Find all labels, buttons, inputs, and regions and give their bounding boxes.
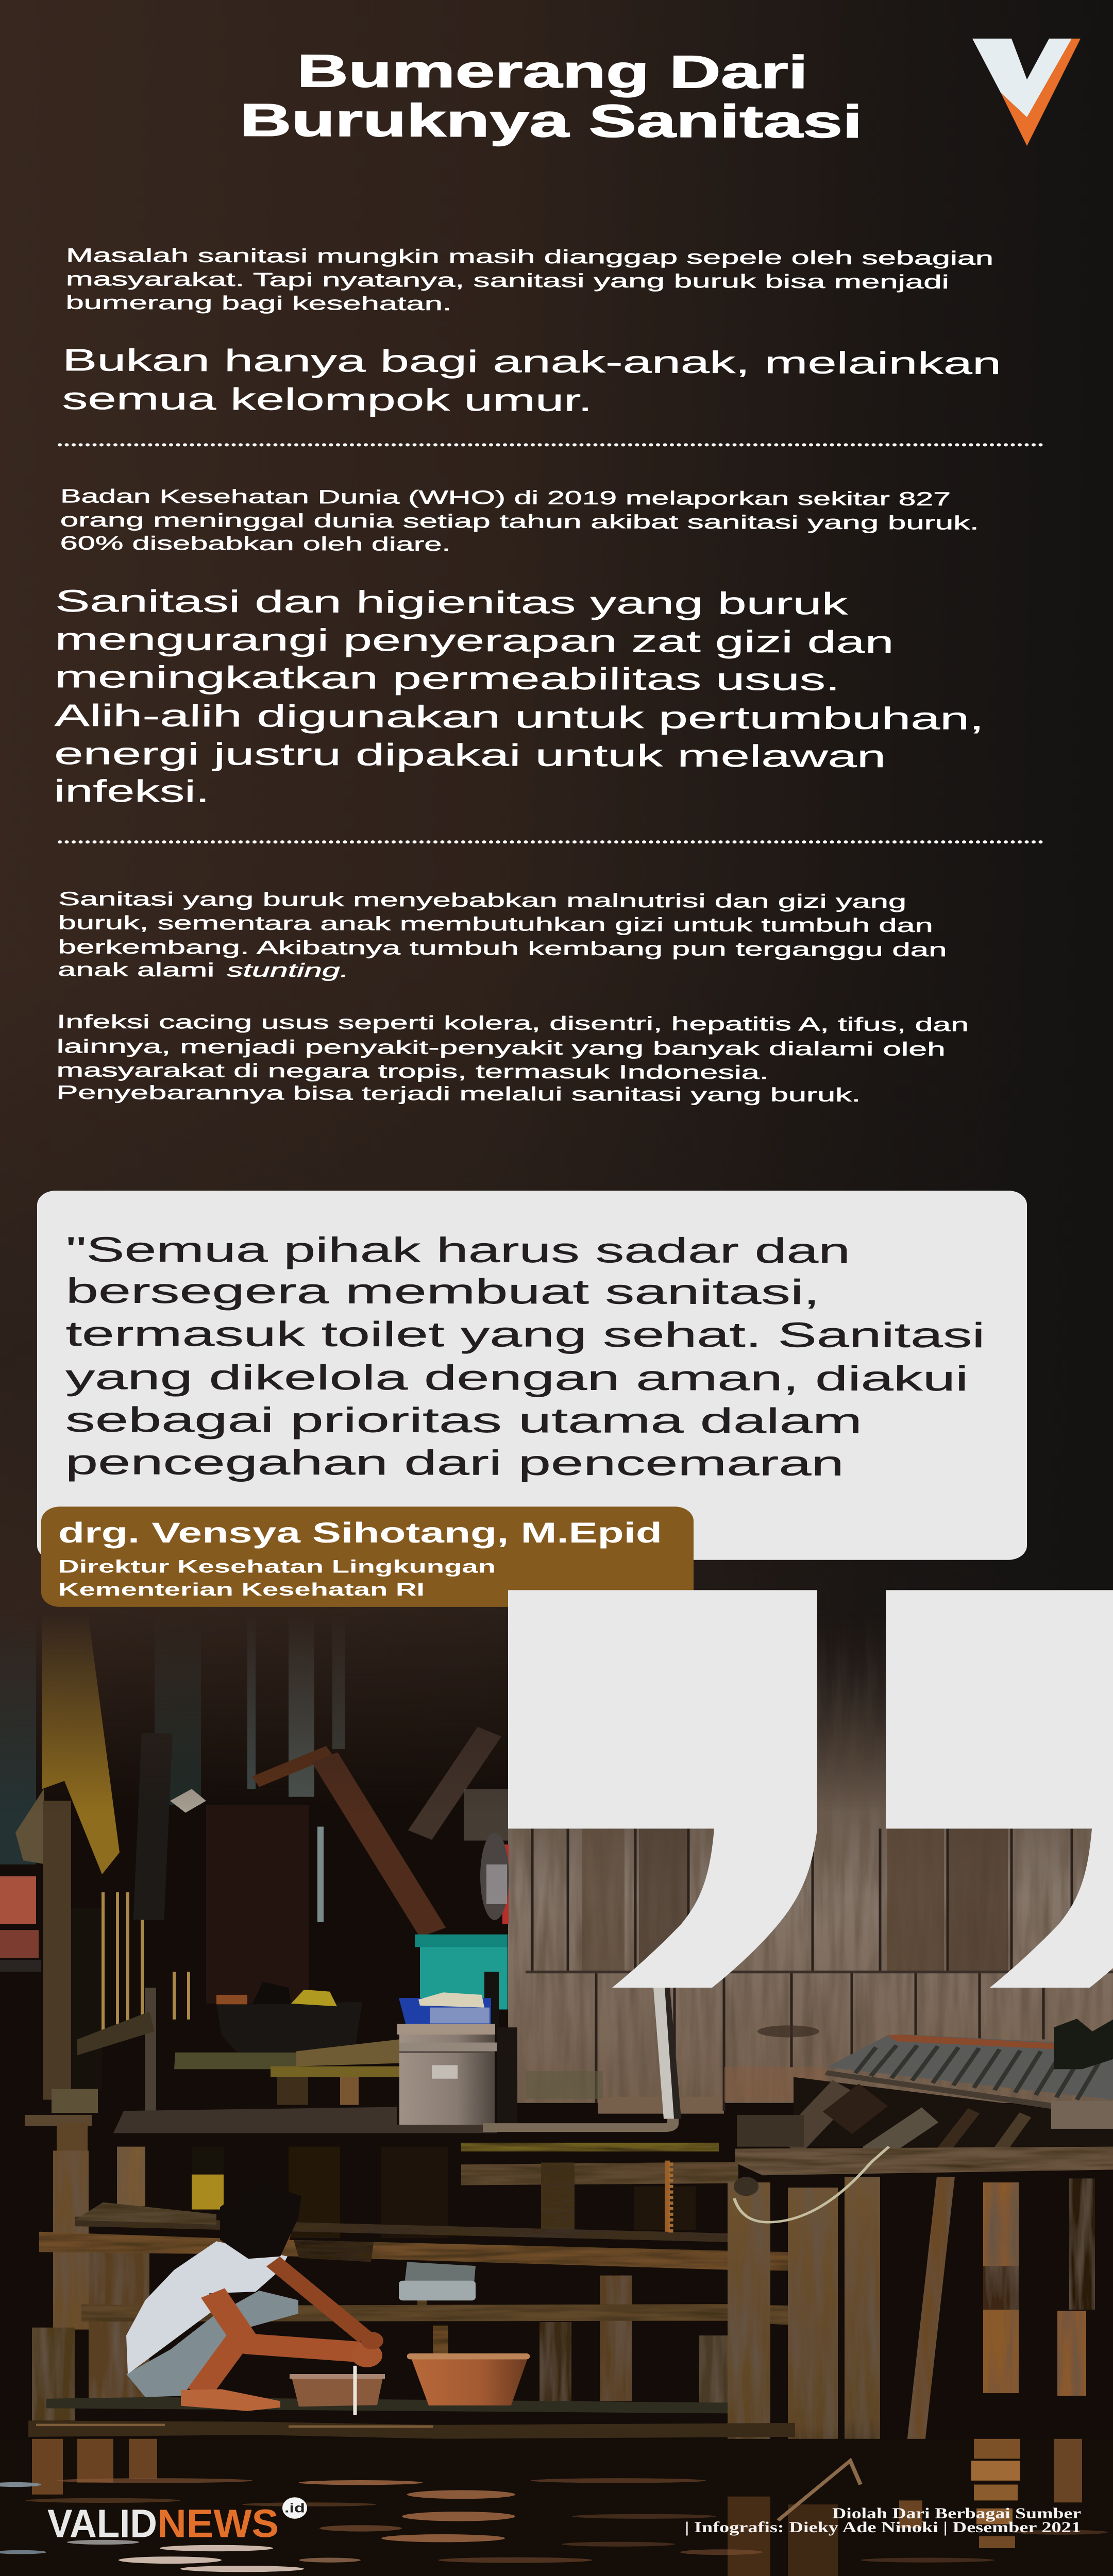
quote text: "Semua pihak harus sadar dan (66, 1230, 850, 1270)
dotted divider 1 (60, 443, 1043, 447)
panel: quote (37, 1191, 1027, 1560)
text block: intro: bumerang bagi kesehatan. (65, 292, 452, 315)
speaker name: drg. Vensya Sihotang, M.Epid (58, 1517, 662, 1549)
highlight: absorption and infection: Alih-alih digunakan untuk pertumbuhan, (55, 698, 984, 736)
text block: intestinal infections (56, 1011, 969, 1106)
blue basket with white stripes (399, 1992, 491, 2025)
text block: intro: masyarakat. Tapi nyatanya, sanitasi yang buruk bisa menjadi (66, 268, 949, 293)
left dark interior with hanging cloth and corrugated sheet (0, 1590, 509, 2119)
title: Buruknya Sanitasi (240, 94, 863, 147)
highlight: all age groups (62, 343, 1001, 419)
source credits: Diolah Dari Berbagai Sumber (832, 2505, 1081, 2522)
quote text (65, 1230, 985, 1483)
deck and under log (28, 2397, 795, 2489)
teal bucket (415, 1934, 508, 2009)
speaker role: Direktur Kesehatan Lingkungan (58, 1556, 496, 1577)
logo: Validnews (47, 2497, 307, 2546)
text block: WHO statistic: orang meninggal dunia setiap tahun akibat sanitasi yang buruk. (60, 510, 979, 534)
text block: intestinal infections: Penyebarannya bisa terjadi melalui sanitasi yang buruk. (56, 1082, 861, 1106)
text block: WHO statistic (60, 485, 979, 557)
dotted divider 2 (60, 840, 1043, 844)
text block: stunting: stunting. (227, 960, 349, 981)
highlight: all age groups: Bukan hanya bagi anak-anak, melainkan (62, 343, 1001, 381)
text block: stunting: buruk, sementara anak membutuhkan gizi untuk tumbuh dan (58, 912, 933, 937)
drain pipe (483, 1988, 681, 2128)
highlight: absorption and infection: meningkatkan permeabilitas usus. (55, 659, 840, 697)
text block: stunting (58, 888, 947, 984)
text block: WHO statistic: 60% disebabkan oleh diare. (60, 533, 451, 555)
logo: Validnews: NEWS (157, 2501, 279, 2546)
highlight: absorption and infection (54, 583, 985, 811)
logo: V mark (972, 39, 1081, 146)
black tub with yellow cloth (216, 1981, 362, 2052)
text block: intestinal infections: Infeksi cacing usus seperti kolera, disentri, hepatitis A, tifus, dan (57, 1011, 969, 1036)
icon: large closing quotation marks (508, 1590, 1113, 1988)
corrugated roof, boots and log pile (737, 2019, 1113, 2155)
source credits: | Infografis: Dieky Ade Ninoki | Desember 2021 (685, 2519, 1081, 2536)
wooden posts (32, 2147, 1095, 2420)
quote text: termasuk toilet yang sehat. Sanitasi (65, 1314, 985, 1355)
water surface with reflections (0, 2439, 1113, 2576)
logo: Validnews: VALID (47, 2501, 157, 2546)
highlight: absorption and infection: energi justru dipakai untuk melawan (54, 736, 886, 774)
text block: intestinal infections: lainnya, menjadi penyakit-penyakit yang banyak dialami oleh (57, 1036, 946, 1060)
highlight: absorption and infection: mengurangi penyerapan zat gizi dan (55, 621, 894, 659)
wooden house wall (508, 1638, 1113, 2114)
wooden steps and deck (25, 2039, 497, 2155)
woman crouching (126, 2181, 383, 2411)
panel: speaker name badge (41, 1506, 694, 1607)
photo: woman washing at stilt house over water (0, 1570, 1113, 2576)
grey bucket stack (396, 2024, 517, 2131)
source credits (685, 2505, 1081, 2536)
highlight: absorption and infection: Sanitasi dan higienitas yang buruk (55, 583, 848, 621)
text block: stunting: Sanitasi yang buruk menyebabkan malnutrisi dan gizi yang (58, 888, 906, 912)
logo: Validnews: .id (284, 2501, 305, 2516)
upper horizontal logs (461, 2143, 1113, 2234)
quote text: yang dikelola dengan aman, diakui (65, 1358, 968, 1398)
text block: WHO statistic: Badan Kesehatan Dunia (WHO) di 2019 melaporkan sekitar 827 (60, 485, 951, 510)
horizontal logs and shelf (39, 2202, 794, 2358)
speaker role (58, 1556, 496, 1600)
title: Bumerang Dari (297, 45, 808, 98)
text block: intro (65, 245, 993, 316)
background slats (192, 2147, 696, 2238)
text block: stunting: anak alami (58, 959, 214, 981)
quote text: sebagai prioritas utama dalam (65, 1400, 862, 1440)
text block: intro: Masalah sanitasi mungkin masih dianggap sepele oleh sebagian (66, 245, 993, 269)
highlight: absorption and infection: infeksi. (54, 773, 210, 809)
highlight: all age groups: semua kelompok umur. (62, 381, 593, 418)
text block: stunting: berkembang. Akibatnya tumbuh kembang pun terganggu dan (58, 936, 947, 961)
quote text: bersegera membuat sanitasi, (66, 1271, 820, 1312)
title (240, 45, 863, 147)
quote text: pencegahan dari pencemaran (65, 1443, 844, 1483)
cookware: silver pot, small bowl and clay basin (290, 2262, 530, 2415)
tall foreground posts with rope (671, 2147, 955, 2505)
text block: intestinal infections: masyarakat di negara tropis, termasuk Indonesia. (56, 1060, 769, 1083)
speaker role: Kementerian Kesehatan RI (58, 1579, 425, 1600)
